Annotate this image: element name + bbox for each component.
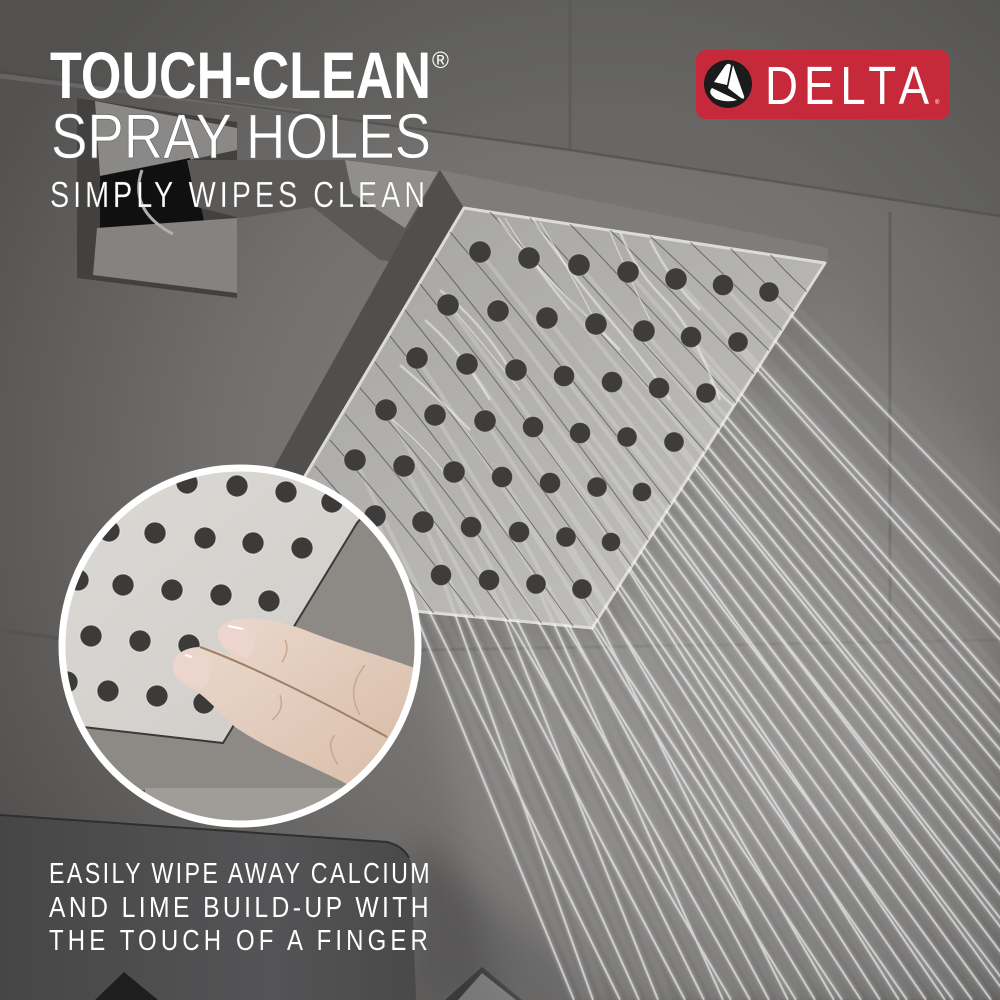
logo registered mark: ® [935,99,940,106]
lower finger [173,647,388,784]
shower head [274,170,828,630]
title line 1: TOUCH-CLEAN [50,38,431,112]
head left side [200,170,464,600]
mist: water glow behind streams [420,270,1000,1000]
caption line 1: EASILY WIPE AWAY CALCIUM [49,858,432,890]
arm highlight [345,160,438,228]
inset circle: finger wiping spray holes [58,464,422,828]
flange lower chrome [93,218,237,293]
title line 2: SPRAY HOLES [51,102,431,172]
caption line 2: AND LIME BUILD-UP WITH [49,892,432,924]
head top band [440,170,828,263]
inset holes [56,472,343,714]
wall flange and shower arm [77,98,440,298]
head face plate [235,208,825,628]
logo: Delta [696,50,950,119]
bottom caption [49,858,432,957]
tub spout and lower fixtures [0,815,522,1000]
upper finger [220,618,414,738]
logo emblem [704,60,752,108]
shower arm [187,160,440,262]
spray holes [344,241,779,599]
logo wordmark: DELTA [765,56,935,116]
caption line 3: THE TOUCH OF A FINGER [49,925,432,957]
title [50,38,449,215]
inset background [142,790,145,792]
water streams [419,314,1000,1000]
chrome ring [139,170,173,234]
flange outer edge [77,98,237,298]
flange dark reflection [100,158,205,228]
water reflections on face [314,212,807,626]
inset plate [66,472,361,744]
inset white ring [62,468,418,824]
flange upper chrome [95,101,237,176]
subtitle: SIMPLY WIPES CLEAN [50,174,429,215]
finger crease and nails [173,624,387,765]
registered mark: ® [432,47,449,73]
